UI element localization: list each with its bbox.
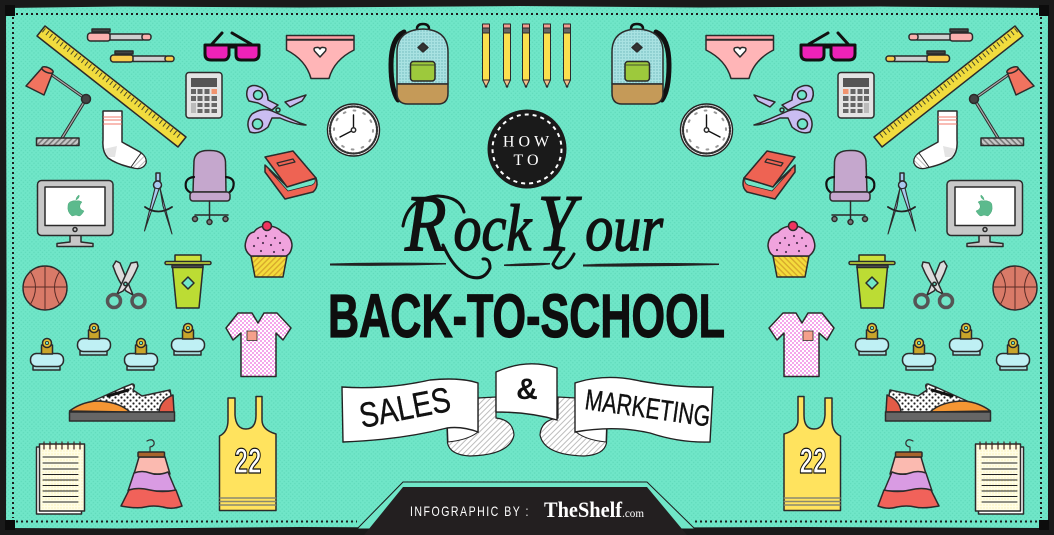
badge: how to xyxy=(488,110,566,188)
icon: bottle 4 left xyxy=(172,324,204,355)
icon: basketball right xyxy=(993,266,1037,310)
icon: underwear left xyxy=(286,36,354,78)
icon: drink cup left xyxy=(165,255,211,308)
icon: clock right xyxy=(680,104,732,156)
icon: sunglasses right xyxy=(801,33,855,60)
icon: grey scissors right xyxy=(915,261,952,308)
icon: monitor right xyxy=(947,180,1022,246)
icon: chair left xyxy=(186,150,234,224)
icon: yellow pen left xyxy=(110,51,174,62)
icon: chair right xyxy=(826,150,874,224)
icon: skirt left xyxy=(121,440,182,508)
icon: calculator right xyxy=(838,72,874,118)
icon: ruler left xyxy=(37,26,186,147)
icon: pencil 5 xyxy=(564,24,570,88)
icon: cupcake right xyxy=(768,222,815,277)
icon: lilac scissors right xyxy=(754,86,813,133)
icon: desk lamp right xyxy=(970,65,1034,146)
icon: notepad left xyxy=(36,442,84,514)
icon: bottle 2 right xyxy=(950,324,982,355)
jersey number: 22 xyxy=(234,442,262,481)
icon: monitor left xyxy=(38,180,113,246)
icon: pencil 2 xyxy=(504,24,510,88)
badge: how to: TO xyxy=(513,152,543,169)
ribbon panel: marketing: MARKETING xyxy=(583,384,712,433)
title script swashes xyxy=(403,196,574,278)
icon: sneaker left xyxy=(70,384,174,421)
ribbon inner white curls xyxy=(448,427,606,442)
title: back-to-school: BACK-TO-SCHOOL xyxy=(328,282,725,350)
ribbon banner xyxy=(342,364,713,456)
title: rock your: our xyxy=(585,192,664,265)
icon: pencils xyxy=(482,24,570,88)
jersey shape xyxy=(784,396,840,510)
icon: backpack left xyxy=(391,24,448,104)
icon: book right xyxy=(743,151,795,199)
ribbon panel: marketing xyxy=(575,377,713,442)
icon: yellow pen right xyxy=(886,51,950,62)
icon: sock right xyxy=(914,111,957,168)
jersey shape xyxy=(220,396,276,510)
ribbon fold right xyxy=(540,397,607,456)
badge: how to: HOW xyxy=(503,134,553,150)
icon: jersey left xyxy=(220,396,276,510)
icon: pencil 1 xyxy=(482,24,490,88)
icon: skirt right xyxy=(878,440,939,508)
icon: bottle 3 right xyxy=(902,338,936,370)
ribbon panel: ampersand: & xyxy=(516,373,538,406)
title: rock your: ock xyxy=(453,192,545,265)
icon: grey scissors left xyxy=(108,261,145,308)
footer tab xyxy=(357,482,695,535)
logo: theshelf: TheShelf.com xyxy=(544,497,645,522)
icon: pencil 3 xyxy=(522,24,530,88)
icon: compass right xyxy=(888,173,916,234)
icon: bottle 1 left xyxy=(30,338,64,370)
icon: bottle 2 left xyxy=(78,324,110,355)
icon: t-shirt right xyxy=(769,313,834,376)
icon: desk lamp left xyxy=(26,65,90,146)
icon: drink cup right xyxy=(849,255,895,308)
jersey number: 22 xyxy=(800,442,826,481)
icon: sunglasses left xyxy=(205,33,259,60)
ribbon panel: sales: SALES xyxy=(356,380,454,436)
icon: pink pen left xyxy=(88,29,151,41)
icon: bottle 1 right xyxy=(996,338,1030,370)
icon: t-shirt left xyxy=(226,313,291,376)
icon: lilac scissors left xyxy=(247,86,306,133)
icon: pink pen right xyxy=(909,29,972,41)
icon: pencil 4 xyxy=(544,24,550,88)
icon: compass left xyxy=(144,173,172,234)
icon: cupcake left xyxy=(245,222,292,277)
icon: backpack right xyxy=(612,24,669,104)
icon: jersey right xyxy=(784,396,840,510)
icon: underwear right xyxy=(706,36,774,78)
icon: notepad right xyxy=(976,442,1024,514)
footer credit label: INFOGRAPHIC BY : xyxy=(410,503,530,519)
icon: book left xyxy=(265,151,317,199)
title rules xyxy=(330,263,719,267)
icon: calculator left xyxy=(186,72,222,118)
ribbon fold left xyxy=(447,397,514,456)
icon: basketball left xyxy=(23,266,67,310)
ribbon panel: ampersand xyxy=(496,364,557,420)
icon: clock left xyxy=(328,104,380,156)
title: rock your: R xyxy=(404,180,447,268)
icon: ruler right xyxy=(874,26,1023,147)
icon: sock left xyxy=(103,111,146,168)
icon: bottle 4 right xyxy=(856,324,888,355)
icon: bottle 3 left xyxy=(124,338,158,370)
title: rock your: Y xyxy=(538,180,582,268)
icon: sneaker right xyxy=(886,384,990,421)
